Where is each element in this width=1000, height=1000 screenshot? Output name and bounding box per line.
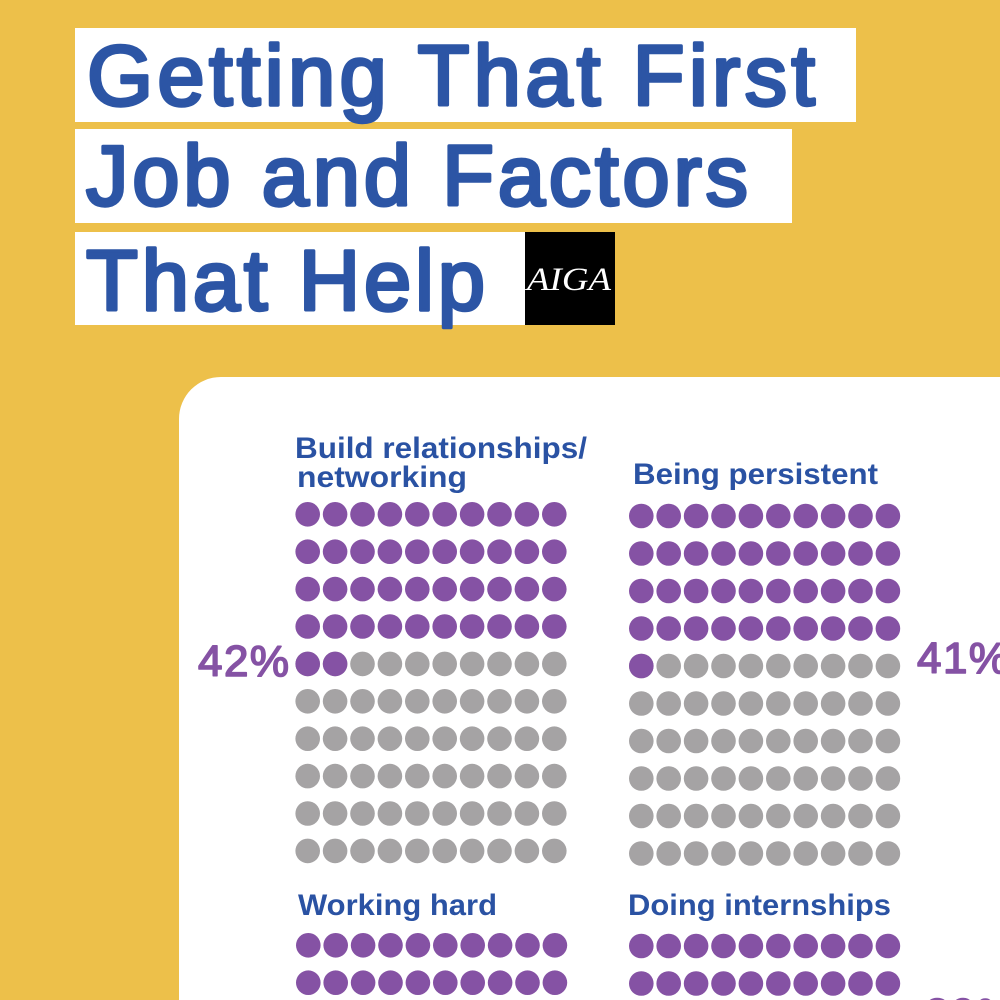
- AIGA logo: AIGA: [525, 262, 612, 298]
- title line 1: Getting That First: [87, 29, 815, 124]
- dot chart: being persistent 41%: [629, 504, 900, 866]
- dot chart: working hard: [296, 933, 567, 995]
- title: [75, 28, 856, 329]
- dot chart: doing internships: [629, 934, 900, 996]
- title line 2: Job and Factors: [86, 129, 748, 224]
- AIGA logo: [525, 232, 615, 325]
- heading: working hard: Working hard: [298, 889, 497, 922]
- heading: build relationships: networking: [297, 461, 467, 494]
- heading: build relationships: Build relationships/: [295, 432, 587, 465]
- percentage: 42%: 42%: [198, 637, 289, 686]
- heading: doing internships: Doing internships: [628, 889, 891, 922]
- panel: white card: [179, 377, 1000, 1000]
- heading: being persistent: Being persistent: [633, 458, 878, 491]
- dot chart: build relationships 42%: [295, 502, 567, 863]
- title line 3: That Help: [86, 234, 485, 329]
